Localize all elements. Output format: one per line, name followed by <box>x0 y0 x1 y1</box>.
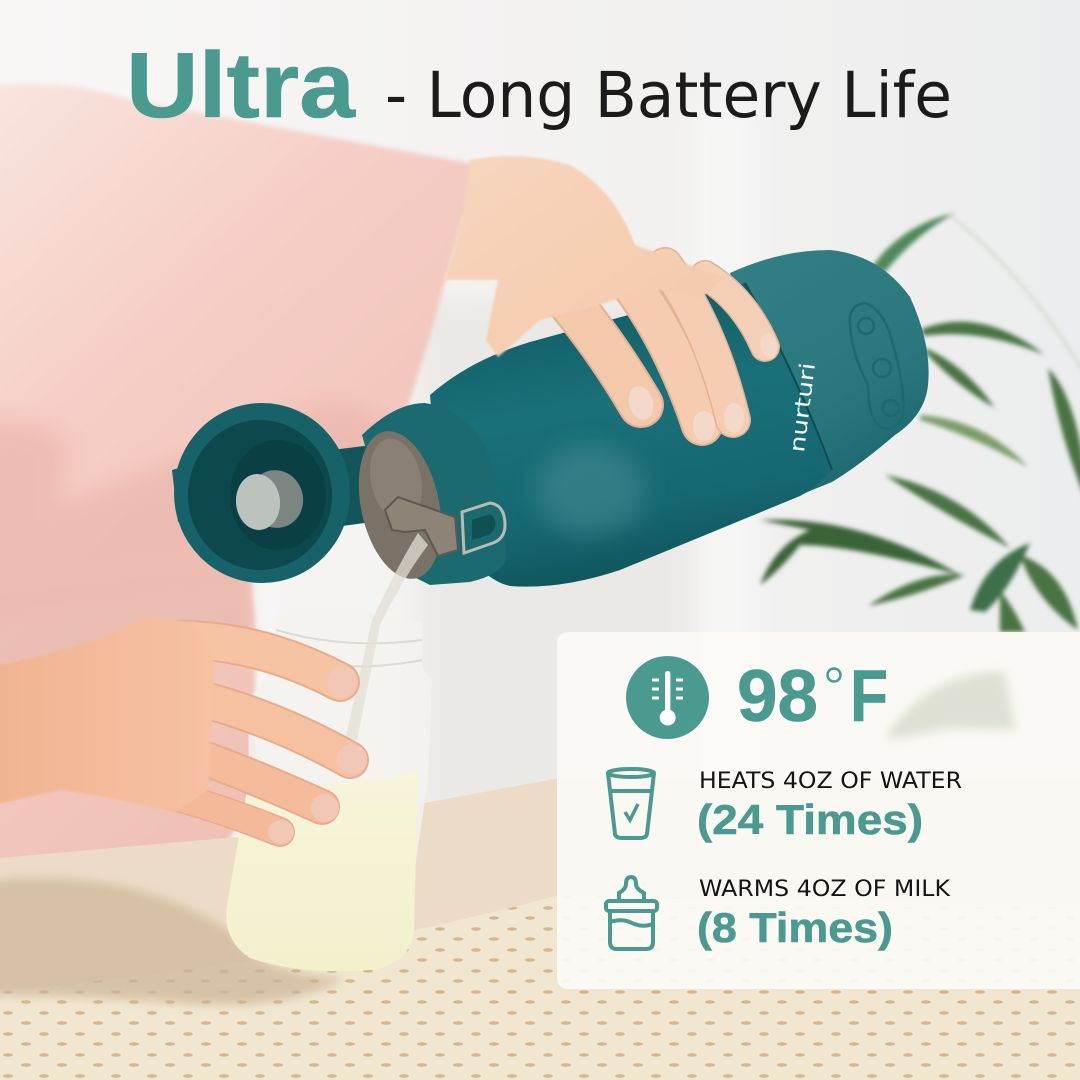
title: Ultra <box>126 33 356 137</box>
bottle base <box>730 250 929 495</box>
icon: thermometer <box>626 656 709 739</box>
lower hand <box>0 618 367 844</box>
logo: nurturi <box>785 361 820 454</box>
little finger <box>705 275 765 347</box>
icon: baby bottle <box>606 877 657 949</box>
temperature value <box>737 656 888 737</box>
index finger <box>180 640 340 682</box>
ring finger <box>175 748 322 807</box>
palm <box>0 618 215 812</box>
temperature value: 98 <box>737 656 818 737</box>
title: - Long Battery Life <box>385 59 952 132</box>
water count: (24 Times) <box>697 796 923 843</box>
table and knit cloth <box>0 778 1080 1080</box>
metal tab <box>385 497 458 556</box>
button panel <box>850 303 903 429</box>
little finger <box>170 795 280 832</box>
teal bottle <box>346 250 929 587</box>
milk count: (8 Times) <box>697 904 893 951</box>
bottle body <box>430 283 832 587</box>
temperature value: F <box>850 656 888 737</box>
pink shirt <box>0 84 480 870</box>
baby bottle <box>226 611 432 971</box>
milk label: WARMS 4OZ OF MILK <box>699 876 951 902</box>
ring finger <box>665 265 733 420</box>
upper arm and hand <box>445 156 780 441</box>
middle finger <box>620 270 702 425</box>
base seam <box>745 283 832 470</box>
lid plug <box>242 464 310 534</box>
loop ring <box>462 503 505 553</box>
back of hand <box>445 156 725 357</box>
bottle collar <box>362 403 506 585</box>
water stream <box>345 533 428 740</box>
middle finger <box>185 695 350 760</box>
title <box>126 33 952 137</box>
info panel <box>557 632 1080 989</box>
flip lid <box>172 403 372 583</box>
index finger <box>552 282 641 405</box>
icon: glass of water <box>608 769 654 838</box>
body highlight <box>535 445 645 535</box>
plant leaves <box>760 213 1080 632</box>
water label: HEATS 4OZ OF WATER <box>699 768 962 794</box>
metal lid <box>346 424 454 586</box>
